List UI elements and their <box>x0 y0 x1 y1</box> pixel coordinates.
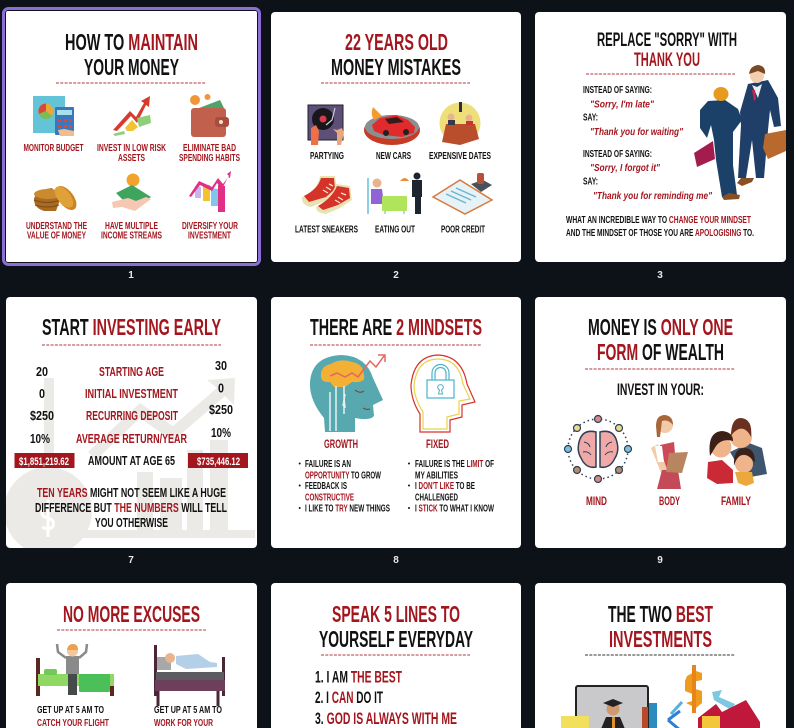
label: diversify your investment: DIVERSIFY YOUR <box>182 220 238 232</box>
text: closing statement: AND THE MINDSET OF THOSE YOU ARE APOLOGISING TO. <box>566 228 754 239</box>
label: body: BODY <box>659 496 680 508</box>
label: eliminate bad spending habits: ELIMINATE BAD <box>183 142 236 154</box>
list: affirmations: 1. I AM THE BEST <box>315 669 402 687</box>
label: understand the value of money: VALUE OF MONEY <box>27 230 86 242</box>
icon: sneakers <box>302 176 352 214</box>
list: growth: I LIKE TO TRY NEW THINGS <box>305 503 390 515</box>
text: examples: "Thank you for waiting" <box>590 127 683 138</box>
text: examples: "Thank you for reminding me" <box>593 191 712 202</box>
page number 1: 1 <box>128 270 134 281</box>
result box: age 30 <box>188 453 248 468</box>
icon: monitor budget <box>33 96 74 136</box>
icon: turntable <box>308 105 344 145</box>
list: fixed: CHALLENGED <box>415 492 458 504</box>
icon: coins <box>34 182 81 214</box>
background watermark chart <box>4 378 255 555</box>
label: expensive dates: EXPENSIVE DATES <box>429 150 491 162</box>
title: THE TWO BEST <box>608 601 713 627</box>
text: work for your: GET UP AT 5 AM TO <box>154 704 222 716</box>
label: mind: MIND <box>586 496 607 508</box>
icon: expensive dates <box>440 102 480 145</box>
title: HOW TO MAINTAIN <box>65 29 198 55</box>
icon: dollar sign, arrows and house <box>668 665 760 728</box>
title <box>586 30 737 74</box>
panel: how to maintain your money <box>4 8 260 264</box>
list: fixed: FAILURE IS THE LIMIT OF <box>415 458 494 470</box>
icon: growth head <box>310 355 385 432</box>
list: fixed <box>408 458 494 515</box>
title: YOUR MONEY <box>84 54 179 80</box>
left column: age 20 values: 0 <box>39 386 45 401</box>
list: growth: FAILURE IS AN <box>305 458 351 470</box>
center column: labels: INITIAL INVESTMENT <box>85 386 178 401</box>
list: affirmations: 2. I CAN DO IT <box>315 689 383 707</box>
list: growth: OPPORTUNITY TO GROW <box>305 470 381 482</box>
heading: growth: GROWTH <box>324 437 358 451</box>
title <box>585 314 735 369</box>
subheading: invest in your: INVEST IN YOUR: <box>617 381 704 399</box>
label: diversify your investment: INVESTMENT <box>188 230 231 242</box>
icon: eating out <box>367 172 422 214</box>
label: understand the value of money <box>26 220 87 242</box>
label: family: FAMILY <box>721 496 751 508</box>
icon: hand with cash <box>112 174 151 211</box>
page number 3: 3 <box>657 270 663 281</box>
right column: age 30 values: 0 <box>218 381 224 396</box>
title: 22 YEARS OLD <box>345 29 448 55</box>
panel: 22 years old money mistakes <box>271 12 521 262</box>
label: diversify your investment <box>182 220 238 242</box>
icon: rising arrow with money <box>113 96 151 136</box>
right column: age 30 values <box>209 358 233 440</box>
result box: age 20 <box>14 453 74 468</box>
panel: money is only one form of wealth <box>535 297 786 548</box>
label: have multiple income streams <box>101 220 162 242</box>
list: fixed: MY ABILITIES <box>415 470 458 482</box>
title <box>56 29 206 83</box>
panel: two best investments <box>535 583 786 728</box>
text: examples: "Sorry, I'm late" <box>590 100 654 111</box>
label: understand the value of money: UNDERSTAND THE <box>26 220 87 232</box>
icon: graduate on screen with books <box>561 686 657 728</box>
title: MONEY IS ONLY ONE <box>588 314 733 340</box>
icon: person asleep in maroon bed <box>154 645 225 706</box>
icon: two businessmen <box>694 65 786 200</box>
panel: start investing early <box>4 297 257 555</box>
icon: fixed head with lock <box>411 355 475 432</box>
result box: age 30: $735,446.12 <box>197 456 240 468</box>
text: catch your flight <box>37 704 109 728</box>
title <box>319 601 473 655</box>
text: conclusion: TEN YEARS MIGHT NOT SEEM LIKE A HUGE <box>37 485 226 500</box>
title: NO MORE EXCUSES <box>63 601 200 627</box>
panel: there are 2 mindsets <box>271 297 521 548</box>
right column: age 30 values: $250 <box>209 402 233 417</box>
left column: age 20 values: 10% <box>30 431 50 446</box>
icon: wallet <box>190 94 229 137</box>
text: work for your <box>154 704 222 728</box>
label: new cars: NEW CARS <box>376 150 411 162</box>
center column: labels: AVERAGE RETURN/YEAR <box>76 431 187 446</box>
icon: family <box>707 418 767 486</box>
panel: speak 5 lines <box>271 583 521 728</box>
icon: diversify bars <box>189 171 231 212</box>
label: invest in low risk assets: INVEST IN LOW RISK <box>97 142 166 154</box>
left column: age 20 values <box>30 364 54 446</box>
page number 2: 2 <box>393 270 399 281</box>
text: conclusion: DIFFERENCE BUT THE NUMBERS WILL TELL <box>35 500 227 515</box>
title: THANK YOU <box>634 50 700 71</box>
text: closing statement <box>566 215 754 239</box>
list: growth: FEEDBACK IS <box>305 480 347 492</box>
label: invest in low risk assets <box>97 142 166 164</box>
title: FORM OF WEALTH <box>597 339 724 365</box>
center column: labels: STARTING AGE <box>99 364 164 379</box>
label: monitor budget: MONITOR BUDGET <box>24 142 84 154</box>
text: conclusion <box>35 485 227 530</box>
left column: age 20 values: $250 <box>30 408 54 423</box>
left column: age 20 values: 20 <box>36 364 48 379</box>
panel: replace sorry with thank you <box>535 12 786 262</box>
page number 9: 9 <box>657 555 663 566</box>
label: have multiple income streams: HAVE MULTIPLE <box>105 220 158 232</box>
title <box>585 601 735 655</box>
label: invest in low risk assets: ASSETS <box>118 152 145 164</box>
label: partying: PARTYING <box>310 150 344 162</box>
title: THERE ARE 2 MINDSETS <box>310 314 482 340</box>
icon: red sports car <box>364 107 420 145</box>
page number 8: 8 <box>393 555 399 566</box>
title: YOURSELF EVERYDAY <box>319 626 473 652</box>
label: eliminate bad spending habits: SPENDING HABITS <box>179 152 240 164</box>
label: eating out: EATING OUT <box>375 224 415 236</box>
label: have multiple income streams: INCOME STREAMS <box>101 230 162 242</box>
right column: age 30 values: 10% <box>211 425 231 440</box>
list: affirmations <box>315 669 457 728</box>
icon: loan agreement and stamp <box>433 173 492 214</box>
text: closing statement: WHAT AN INCREDIBLE WAY TO CHANGE YOUR MINDSET <box>566 215 751 226</box>
list: fixed: I DON'T LIKE TO BE <box>415 480 475 492</box>
panel: no more excuses <box>6 583 257 728</box>
label: eliminate bad spending habits <box>179 142 240 164</box>
text: examples: SAY: <box>583 176 598 188</box>
icon: woman with clipboard <box>651 415 688 489</box>
list: growth: CONSTRUCTIVE <box>305 492 354 504</box>
title: INVESTMENTS <box>609 626 712 652</box>
list: growth <box>299 458 390 515</box>
title <box>321 29 470 83</box>
center column: labels <box>76 364 187 468</box>
page number 7: 7 <box>128 555 134 566</box>
list: fixed: I STICK TO WHAT I KNOW <box>415 503 494 515</box>
label: latest sneakers: LATEST SNEAKERS <box>295 224 358 236</box>
result box: age 20: $1,851,219.62 <box>19 456 69 468</box>
right column: age 30 values: 30 <box>215 358 227 373</box>
text: examples: SAY: <box>583 112 598 124</box>
icon: person jumping out of green bed <box>36 644 114 696</box>
center column: labels: AMOUNT AT AGE 65 <box>88 453 175 468</box>
text: conclusion: YOU OTHERWISE <box>95 515 168 530</box>
list: affirmations: 3. GOD IS ALWAYS WITH ME <box>315 710 457 728</box>
title: SPEAK 5 LINES TO <box>332 601 460 627</box>
text: examples <box>583 85 712 202</box>
text: examples: INSTEAD OF SAYING: <box>583 149 652 160</box>
title: MONEY MISTAKES <box>331 54 461 80</box>
title: START INVESTING EARLY <box>42 314 221 340</box>
heading: fixed: FIXED <box>426 437 449 451</box>
text: examples: INSTEAD OF SAYING: <box>583 85 652 96</box>
label: poor credit: POOR CREDIT <box>441 224 485 236</box>
icon: brain with nodes <box>564 416 632 482</box>
text: examples: "Sorry, I forgot it" <box>590 163 660 174</box>
text: catch your flight: GET UP AT 5 AM TO <box>37 704 104 716</box>
center column: labels: RECURRING DEPOSIT <box>86 408 178 423</box>
